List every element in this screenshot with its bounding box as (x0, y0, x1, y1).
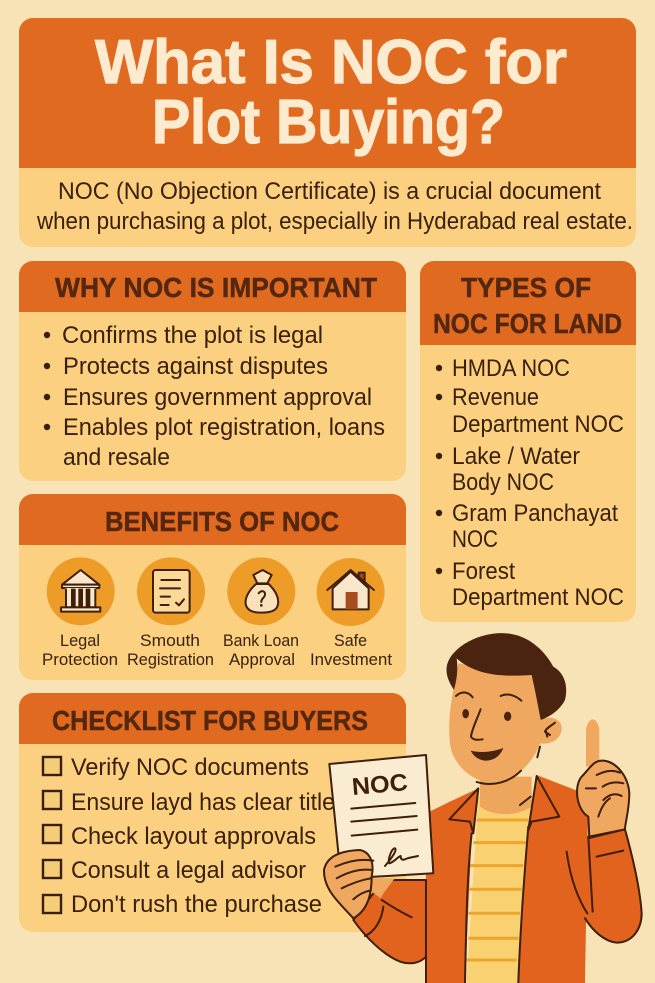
benefit labels: Safe (334, 632, 367, 650)
benefit labels: Registration (127, 651, 214, 669)
man: left sleeve (353, 880, 426, 963)
bullet list: NOC types: Department NOC (452, 584, 624, 611)
man: raised fist (577, 761, 629, 837)
bullet list: reasons (44, 322, 385, 471)
panel: types of NOC for land (420, 261, 636, 622)
title (95, 28, 567, 157)
benefit labels: Protection (42, 651, 118, 669)
heading: why NOC is important: WHY NOC IS IMPORTANT (55, 272, 377, 303)
checklist items: Consult a legal advisor (71, 857, 306, 884)
man: jacket (426, 775, 588, 983)
bullet list: reasons: Confirms the plot is legal (62, 322, 323, 349)
heading: types of NOC (433, 272, 622, 339)
icon: money bag (227, 557, 295, 625)
bullet list: NOC types: Department NOC (452, 411, 624, 438)
checklist items: Don't rush the purchase (71, 891, 322, 918)
bullet list: reasons: Protects against disputes (63, 353, 328, 380)
title: What Is NOC for (95, 28, 567, 97)
bullet list: NOC types: Gram Panchayat (452, 500, 618, 527)
title: Plot Buying? (152, 88, 505, 157)
man: hand holding paper (324, 850, 412, 936)
bullet list: reasons: Enables plot registration, loans (63, 414, 385, 441)
bullet list: NOC types (436, 355, 624, 611)
checkboxes (43, 757, 61, 913)
bullet list: NOC types: Revenue (452, 384, 539, 411)
checklist items: Ensure layd has clear title (71, 789, 335, 816)
man: wrist skin (372, 878, 395, 898)
bullet list: NOC types: Lake / Water (452, 443, 580, 470)
benefit labels: Investment (310, 651, 392, 669)
intro text (36, 178, 633, 235)
panel: why NOC is important (19, 261, 406, 481)
heading: checklist: CHECKLIST FOR BUYERS (52, 705, 368, 736)
bullet list: NOC types: Forest (452, 558, 515, 585)
man: neck (480, 777, 532, 814)
intro text: NOC (No Objection Certificate) is a crucial document (58, 178, 601, 205)
checklist items: Verify NOC documents (71, 754, 309, 781)
document: NOC paper: NOC (351, 769, 409, 801)
man: jacket crease (567, 837, 593, 913)
panel: checklist for buyers (19, 693, 406, 932)
man: raised right arm (577, 820, 642, 943)
checklist items: Check layout approvals (71, 823, 316, 850)
bullet list: NOC types: HMDA NOC (452, 355, 570, 382)
illustration: man holding NOC document (324, 633, 642, 983)
icon: house (317, 558, 385, 626)
panel: title and intro (19, 18, 636, 247)
bullet list: reasons: Ensures government approval (63, 384, 372, 411)
man: hair (447, 633, 566, 720)
benefit labels (42, 632, 392, 669)
checklist items (71, 754, 335, 918)
man: face (449, 663, 540, 783)
man: sleeve crease (597, 851, 623, 857)
benefit labels: Smouth (140, 632, 200, 650)
icon: bank building (47, 557, 115, 625)
man: ear (540, 718, 562, 744)
benefit labels: Bank Loan (223, 632, 299, 650)
heading: types of NOC: NOC FOR LAND (433, 308, 622, 339)
bullet list: reasons: and resale (63, 444, 170, 471)
icon: checklist document (137, 557, 205, 625)
man: facial features (456, 692, 540, 784)
heading: types of NOC: TYPES OF (461, 272, 591, 303)
man: shirt (467, 797, 532, 983)
benefit labels: Approval (229, 651, 295, 669)
bullet list: NOC types: Body NOC (452, 469, 554, 496)
panel: benefits of NOC (19, 494, 406, 680)
document: NOC paper (329, 755, 433, 879)
benefit labels: Legal (60, 632, 100, 650)
man: raised index finger (586, 719, 599, 767)
heading: benefits: BENEFITS OF NOC (105, 506, 339, 537)
bullet list: NOC types: NOC (452, 526, 498, 553)
